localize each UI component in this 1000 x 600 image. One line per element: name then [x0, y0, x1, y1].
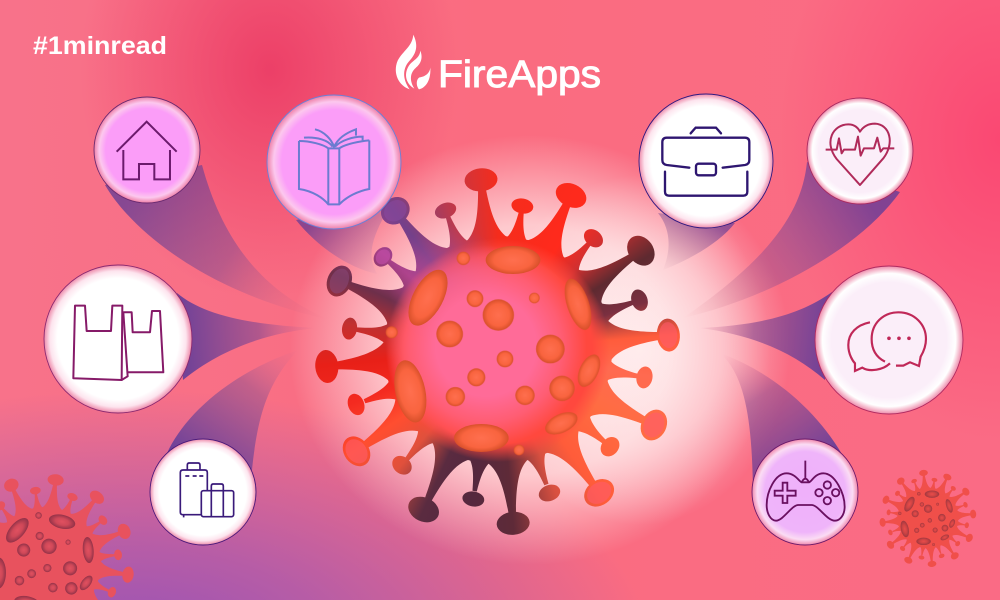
icon circle: shopping bags — [44, 265, 192, 413]
spike head highlights — [326, 196, 678, 508]
virus body and spikes — [308, 160, 688, 540]
icon: house — [117, 122, 177, 179]
shadow beam: luggage — [165, 350, 298, 470]
shadow beam: chat — [700, 292, 832, 380]
icon: briefcase — [662, 128, 749, 196]
hashtag label: #1minread — [33, 32, 167, 60]
icon: shopping bags — [73, 306, 163, 380]
main coronavirus — [308, 160, 688, 540]
shadow beam: game controller — [720, 353, 848, 490]
icon: luggage — [180, 463, 234, 517]
shadow beam: book — [296, 202, 392, 274]
icon: game controller — [767, 461, 845, 521]
icon circle: book — [267, 95, 401, 229]
icon: heart with pulse — [826, 124, 894, 185]
shadow beam: briefcase — [658, 213, 735, 270]
shadow beam: heart — [683, 162, 900, 318]
icon circle: house — [94, 97, 200, 203]
icon circle: briefcase — [639, 94, 773, 228]
icon circle: luggage — [150, 439, 256, 545]
virus surface spots — [386, 246, 605, 455]
shadow beam: house — [105, 165, 330, 320]
icon circle: heart — [807, 98, 913, 204]
shadow beam: shopping bags — [177, 293, 317, 380]
icon circle: chat — [815, 266, 963, 414]
icon: open book — [299, 129, 369, 204]
small virus bottom right — [879, 469, 977, 568]
FireApps logo — [396, 35, 601, 96]
icon: chat bubbles — [848, 312, 926, 371]
flame icon — [396, 35, 430, 89]
small virus bottom left — [0, 454, 153, 600]
wordmark: FireApps — [438, 54, 601, 96]
icon circle: game controller — [752, 439, 858, 545]
